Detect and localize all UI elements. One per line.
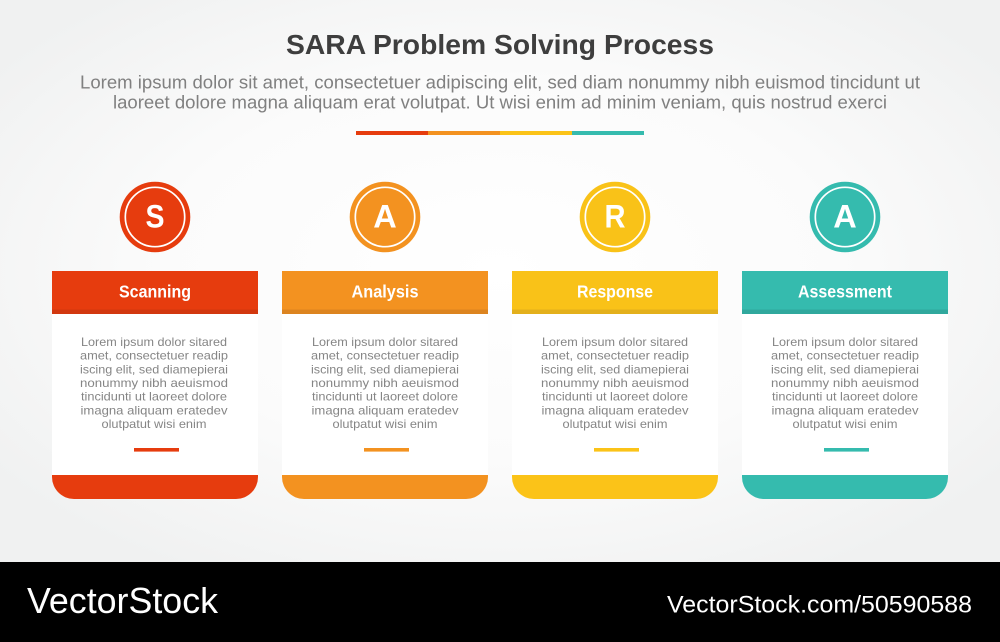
short accent line (364, 448, 409, 452)
subtitle text (80, 72, 920, 112)
card text: nonummy nibh aeuismod (311, 376, 459, 390)
card text: imagna aliquam eratedev (772, 403, 918, 417)
card heading: Analysis (352, 282, 419, 302)
card text: tincidunti ut laoreet dolore (772, 390, 918, 404)
card heading (742, 271, 948, 314)
card footer (282, 475, 488, 499)
card text: olutpatut wisi enim (102, 417, 206, 431)
icon: letter A badge: A (373, 198, 397, 234)
card text: iscing elit, sed diamepierai (541, 362, 689, 376)
card text: iscing elit, sed diamepierai (311, 362, 459, 376)
icon: letter A badge (350, 182, 420, 252)
card text: Lorem ipsum dolor sitared (81, 335, 227, 349)
short accent line (134, 448, 179, 452)
card text: Lorem ipsum dolor sitared (542, 335, 688, 349)
card text: Lorem ipsum dolor sitared (772, 335, 918, 349)
card text: olutpatut wisi enim (562, 417, 668, 431)
card text: olutpatut wisi enim (332, 417, 438, 431)
watermark footer band (0, 562, 1000, 642)
card text (771, 335, 919, 431)
card text: imagna aliquam eratedev (542, 403, 688, 417)
card text: olutpatut wisi enim (792, 417, 898, 431)
card heading: Assessment (798, 282, 892, 302)
card text: amet, consectetuer readip (311, 349, 459, 363)
title: SARA Problem Solving Process (286, 29, 714, 60)
icon: letter S badge (120, 182, 190, 252)
card text: amet, consectetuer readip (541, 349, 689, 363)
card text: tincidunti ut laoreet dolore (312, 390, 458, 404)
card heading: Scanning (119, 282, 191, 302)
icon: letter R badge: R (604, 198, 626, 234)
card text: Lorem ipsum dolor sitared (312, 335, 458, 349)
card text: imagna aliquam eratedev (80, 403, 228, 417)
icon: letter S badge: S (146, 198, 164, 234)
icon: letter R badge (580, 182, 650, 252)
subtitle text: Lorem ipsum dolor sit amet, consectetuer adipiscing elit, sed diam nonummy nibh euismod tincidunt ut (80, 72, 920, 92)
panel: Scanning (52, 182, 258, 499)
card text (541, 335, 689, 431)
panel: Analysis (282, 182, 488, 499)
card text: iscing elit, sed diamepierai (80, 362, 228, 376)
card text: amet, consectetuer readip (80, 349, 228, 363)
watermark logo text: VectorStock (27, 580, 219, 621)
card text: nonummy nibh aeuismod (541, 376, 689, 390)
card body (52, 314, 258, 476)
icon: letter A badge (810, 182, 880, 252)
card footer (512, 475, 718, 499)
card body (742, 314, 948, 476)
card heading (52, 271, 258, 314)
card text: nonummy nibh aeuismod (771, 376, 919, 390)
card heading (512, 271, 718, 314)
card text: iscing elit, sed diamepierai (771, 362, 919, 376)
panel: Response (512, 182, 718, 499)
panel: Assessment (742, 182, 948, 499)
card footer (742, 475, 948, 499)
card text: tincidunti ut laoreet dolore (542, 390, 688, 404)
icon: letter A badge: A (833, 198, 857, 234)
card text: imagna aliquam eratedev (312, 403, 458, 417)
subtitle text: laoreet dolore magna aliquam erat volutpat. Ut wisi enim ad minim veniam, quis nostrud exerci (113, 92, 887, 112)
card heading: Response (577, 282, 653, 302)
card text (311, 335, 459, 431)
short accent line (594, 448, 639, 452)
card heading (282, 271, 488, 314)
short accent line (824, 448, 869, 452)
card text: nonummy nibh aeuismod (80, 376, 228, 390)
four-colour divider bar (356, 131, 644, 135)
card body (512, 314, 718, 476)
watermark image id: VectorStock.com/50590588 (667, 592, 972, 619)
card footer (52, 475, 258, 499)
card text: tincidunti ut laoreet dolore (81, 390, 227, 404)
card text (80, 335, 228, 431)
card body (282, 314, 488, 476)
card text: amet, consectetuer readip (771, 349, 919, 363)
